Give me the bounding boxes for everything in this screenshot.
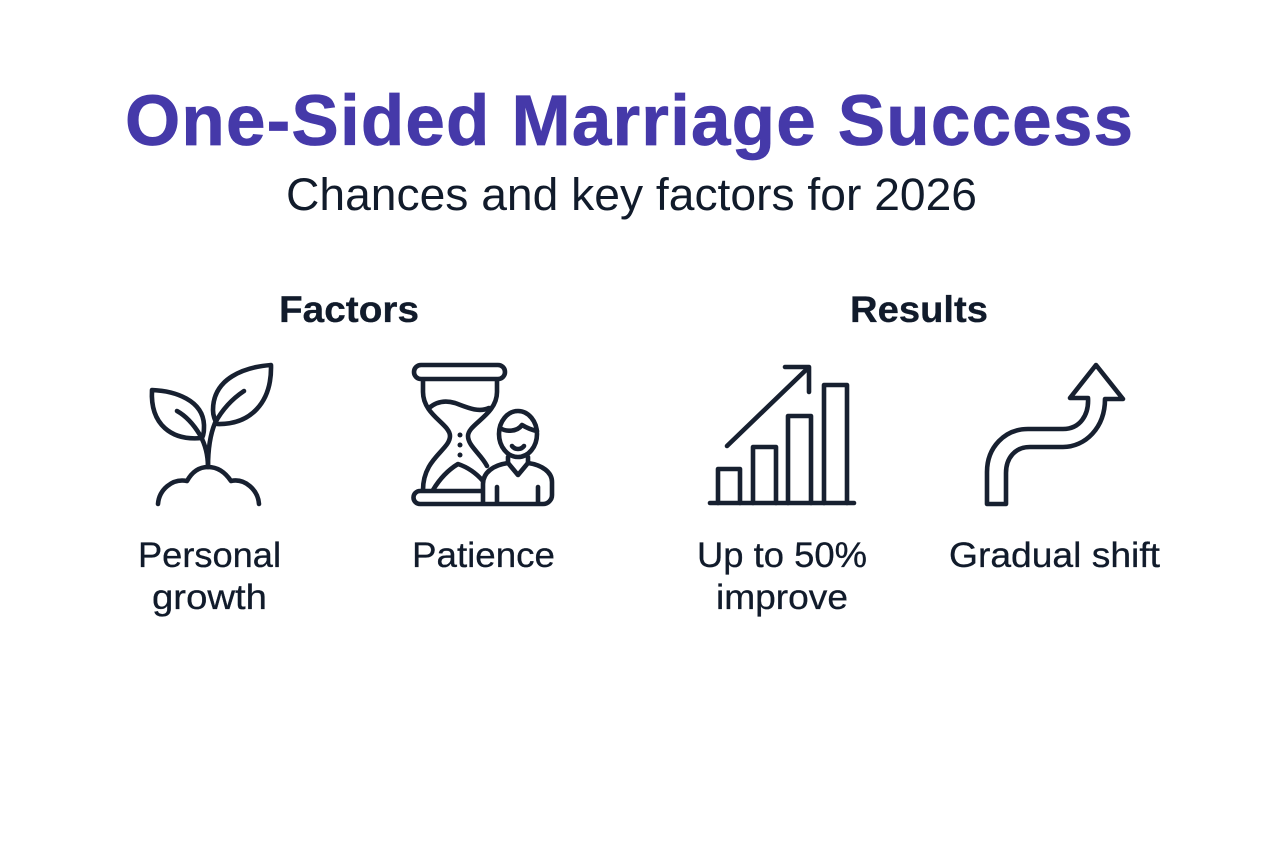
- label: personal growth: [138, 536, 281, 617]
- heading: results: Results: [850, 289, 988, 330]
- panel: factors: [138, 289, 555, 617]
- label: up to 50% improve: improve: [716, 578, 848, 617]
- icon: hourglass sand dots: [458, 432, 462, 458]
- label: up to 50% improve: [697, 536, 867, 617]
- icon: sprouting plant: [152, 365, 271, 504]
- label: personal growth: growth: [152, 578, 267, 617]
- icon: rising bar chart: [710, 367, 854, 503]
- panel: results: [697, 289, 1160, 617]
- label: personal growth: Personal: [138, 536, 281, 575]
- label: patience: Patience: [412, 536, 555, 575]
- heading: factors: Factors: [279, 289, 419, 330]
- subtitle: Chances and key factors for 2026: [286, 169, 977, 220]
- icon: hourglass and person: [414, 365, 552, 504]
- icon: curved upward arrow: [987, 365, 1123, 504]
- title: One-Sided Marriage Success: [125, 82, 1133, 161]
- label: up to 50% improve: Up to 50%: [697, 536, 867, 575]
- label: gradual shift: Gradual shift: [949, 536, 1160, 575]
